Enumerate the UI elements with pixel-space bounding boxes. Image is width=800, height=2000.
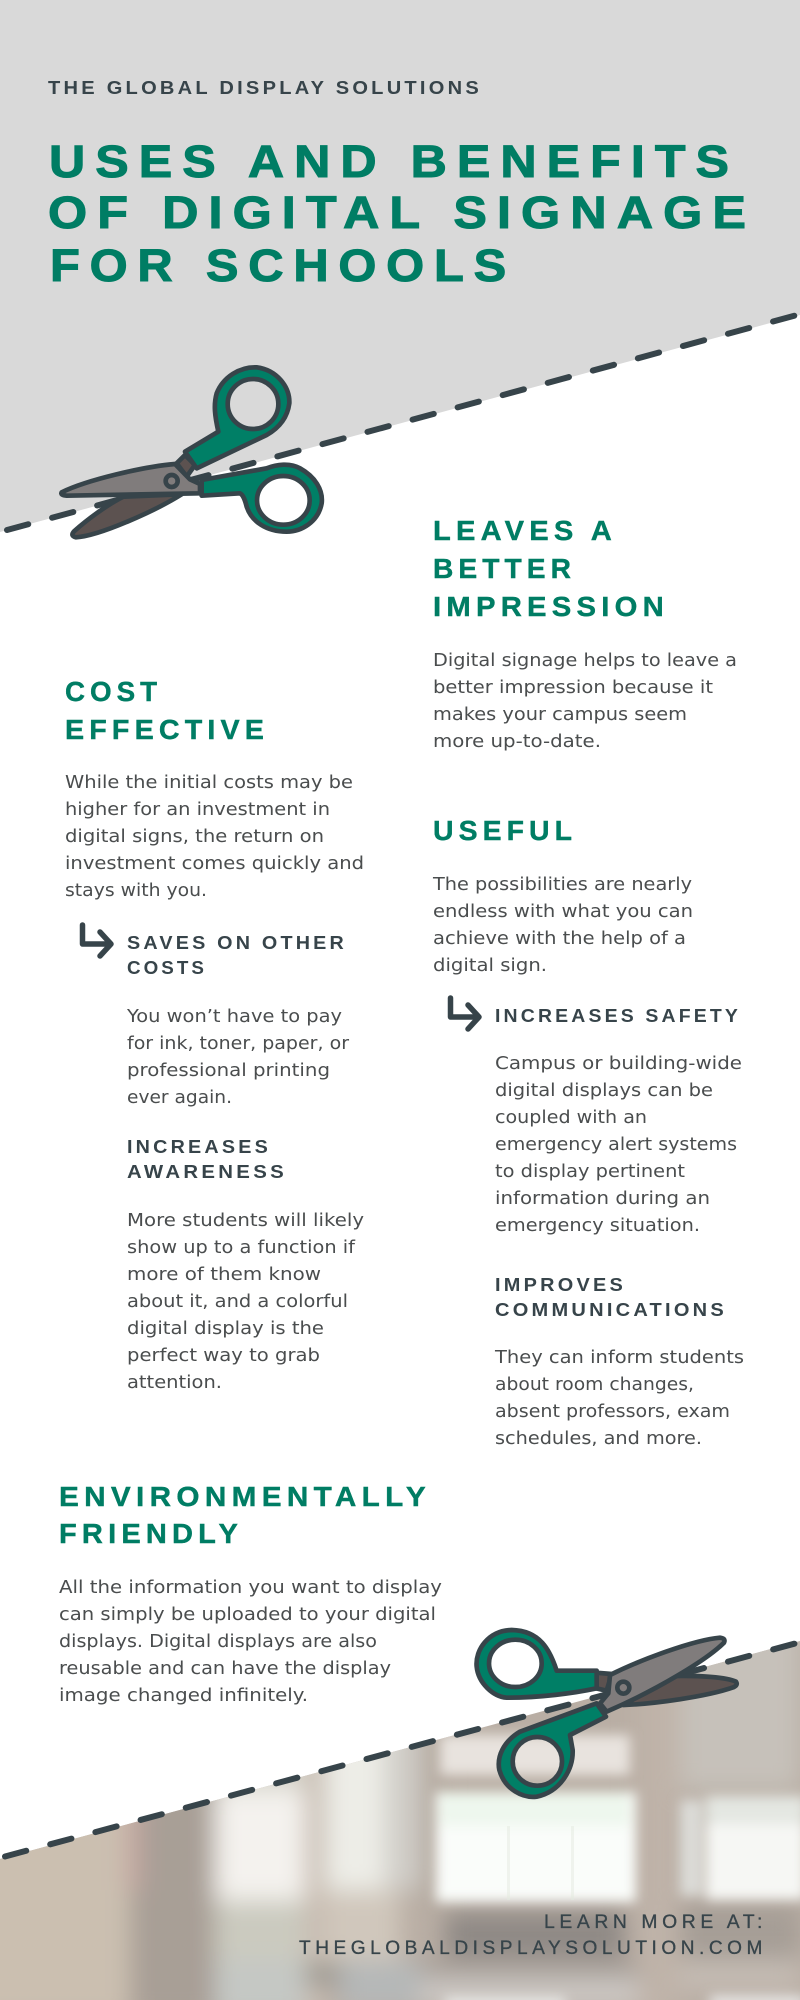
body text: achieve with the help of a xyxy=(433,928,686,949)
body text: stays with you. xyxy=(65,880,207,901)
body text: better impression because it xyxy=(433,677,713,698)
body text: about room changes, xyxy=(495,1374,694,1395)
title: OF DIGITAL SIGNAGE xyxy=(48,187,756,238)
background panel: grey header xyxy=(0,0,800,532)
body text xyxy=(432,874,693,976)
body text: image changed infinitely. xyxy=(59,1685,308,1706)
heading xyxy=(59,1481,431,1549)
subheading: saves on other costs xyxy=(127,932,347,978)
footer: learn more: THEGLOBALDISPLAYSOLUTION.COM xyxy=(299,1938,767,1959)
body text: show up to a function if xyxy=(127,1237,356,1258)
body text: for ink, toner, paper, or xyxy=(127,1033,350,1054)
body text: about it, and a colorful xyxy=(127,1291,348,1312)
body text: They can inform students xyxy=(494,1347,744,1368)
body text: schedules, and more. xyxy=(495,1428,702,1449)
subheading: increases awareness xyxy=(127,1136,287,1182)
body text: emergency situation. xyxy=(495,1215,700,1236)
body text xyxy=(433,650,737,752)
body text xyxy=(495,1053,742,1236)
panel: environmentally friendly xyxy=(59,1481,442,1706)
body text xyxy=(127,1210,364,1393)
body text: digital display is the xyxy=(127,1318,324,1339)
body text xyxy=(126,1006,350,1108)
body text: reusable and can have the display xyxy=(59,1658,391,1679)
dashed cut line: top xyxy=(7,315,797,530)
subheading: saves on other costs: COSTS xyxy=(127,957,207,978)
background photo: blurred school hallway xyxy=(0,1620,800,2000)
title: USES AND BENEFITS xyxy=(49,136,739,187)
panel: leaves a better impression xyxy=(433,515,737,752)
body text: absent professors, exam xyxy=(495,1401,730,1422)
body text: more up-to-date. xyxy=(433,731,601,752)
heading: FRIENDLY xyxy=(59,1518,243,1549)
subheading: saves on other costs: SAVES ON OTHER xyxy=(127,932,347,953)
body text: perfect way to grab xyxy=(127,1345,320,1366)
body text: attention. xyxy=(127,1372,222,1393)
subheading: increases awareness: INCREASES xyxy=(127,1136,271,1157)
body text: All the information you want to display xyxy=(59,1577,442,1598)
body text: can simply be uploaded to your digital xyxy=(59,1604,436,1625)
dashed cut line: bottom xyxy=(5,1643,797,1856)
heading: IMPRESSION xyxy=(433,591,669,622)
body text: digital signs, the return on xyxy=(65,826,324,847)
body text: to display pertinent xyxy=(495,1161,685,1182)
body text: digital sign. xyxy=(433,955,547,976)
body text: investment comes quickly and xyxy=(65,853,364,874)
eyebrow: company name: THE GLOBAL DISPLAY SOLUTIONS xyxy=(48,77,482,98)
title: FOR SCHOOLS xyxy=(50,240,516,291)
heading xyxy=(65,676,269,745)
header text block xyxy=(48,77,756,291)
icon: bottom scissors xyxy=(477,1630,737,1797)
body text: more of them know xyxy=(127,1264,321,1285)
body text xyxy=(65,772,364,901)
footer: learn more xyxy=(299,1912,767,1959)
heading: USEFUL xyxy=(433,815,577,846)
body text: emergency alert systems xyxy=(495,1134,737,1155)
body text: ever again. xyxy=(127,1087,232,1108)
body text: makes your campus seem xyxy=(433,704,687,725)
body text: While the initial costs may be xyxy=(65,772,353,793)
body text: You won’t have to pay xyxy=(126,1006,342,1027)
heading xyxy=(433,515,669,622)
footer: learn more: LEARN MORE AT: xyxy=(544,1912,767,1933)
heading: LEAVES A xyxy=(433,515,617,546)
body text xyxy=(59,1577,442,1706)
heading: BETTER xyxy=(433,553,576,584)
subheading: increases awareness: AWARENESS xyxy=(127,1161,287,1182)
heading: ENVIRONMENTALLY xyxy=(59,1481,431,1512)
body text: displays. Digital displays are also xyxy=(59,1631,377,1652)
body text: Campus or building-wide xyxy=(495,1053,742,1074)
body text: digital displays can be xyxy=(495,1080,713,1101)
body text: The possibilities are nearly xyxy=(432,874,692,895)
icon: arrow xyxy=(82,925,111,956)
icon: top scissors xyxy=(61,367,322,537)
heading: EFFECTIVE xyxy=(65,714,269,745)
body text: endless with what you can xyxy=(433,901,693,922)
title xyxy=(48,136,756,291)
subheading: improves communications: COMMUNICATIONS xyxy=(495,1299,727,1320)
body text: information during an xyxy=(495,1188,710,1209)
body text: More students will likely xyxy=(127,1210,364,1231)
subheading: increases safety: INCREASES SAFETY xyxy=(495,1005,741,1026)
subheading: improves communications xyxy=(495,1274,727,1320)
body text: coupled with an xyxy=(495,1107,647,1128)
body text: professional printing xyxy=(127,1060,330,1081)
icon: arrow xyxy=(450,998,479,1029)
body text xyxy=(494,1347,744,1449)
body text: higher for an investment in xyxy=(65,799,330,820)
body text: Digital signage helps to leave a xyxy=(433,650,737,671)
panel: useful xyxy=(432,815,744,1449)
subheading: improves communications: IMPROVES xyxy=(495,1274,626,1295)
panel: cost effective xyxy=(65,676,364,1393)
heading: COST xyxy=(65,676,162,707)
